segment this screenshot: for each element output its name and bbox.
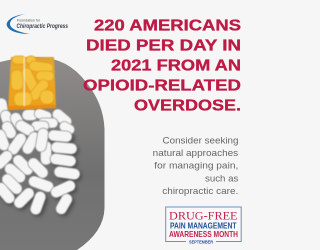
body text: for managing pain, (154, 161, 238, 172)
heading: OVERDOSE. (134, 98, 241, 114)
body text: such as (205, 173, 239, 184)
capsules inside bottle (11, 56, 54, 106)
badge month: SEPTEMBER (189, 240, 213, 246)
grey tray (0, 57, 104, 250)
heading: 2021 FROM AN (111, 58, 241, 74)
logo: Foundation for Chiropractic Progress (7, 14, 68, 34)
heading: DIED PER DAY IN (86, 38, 241, 54)
body text: natural approaches (153, 148, 238, 159)
awareness month badge (166, 207, 241, 246)
bottle highlight (24, 57, 25, 106)
body text: Consider seeking (162, 135, 238, 146)
photo: grey tray with pills and bottle (0, 56, 104, 250)
body text (153, 135, 239, 197)
pills shadows (0, 131, 83, 219)
badge month gap (186, 239, 216, 244)
heading: OPIOID-RELATED (83, 78, 241, 94)
badge frame (166, 207, 241, 242)
logo small line: Foundation for (17, 18, 41, 22)
badge title: DRUG-FREE (169, 208, 238, 222)
white pills (0, 97, 81, 216)
background (0, 0, 250, 250)
bottle rim (8, 104, 56, 110)
heading: 220 AMERICANS (94, 18, 241, 34)
logo swoosh (7, 14, 30, 34)
heading (83, 18, 241, 114)
orange pill bottle (8, 56, 56, 110)
body text: chiropractic care. (162, 186, 238, 197)
logo name: Chiropractic Progress (16, 23, 68, 30)
